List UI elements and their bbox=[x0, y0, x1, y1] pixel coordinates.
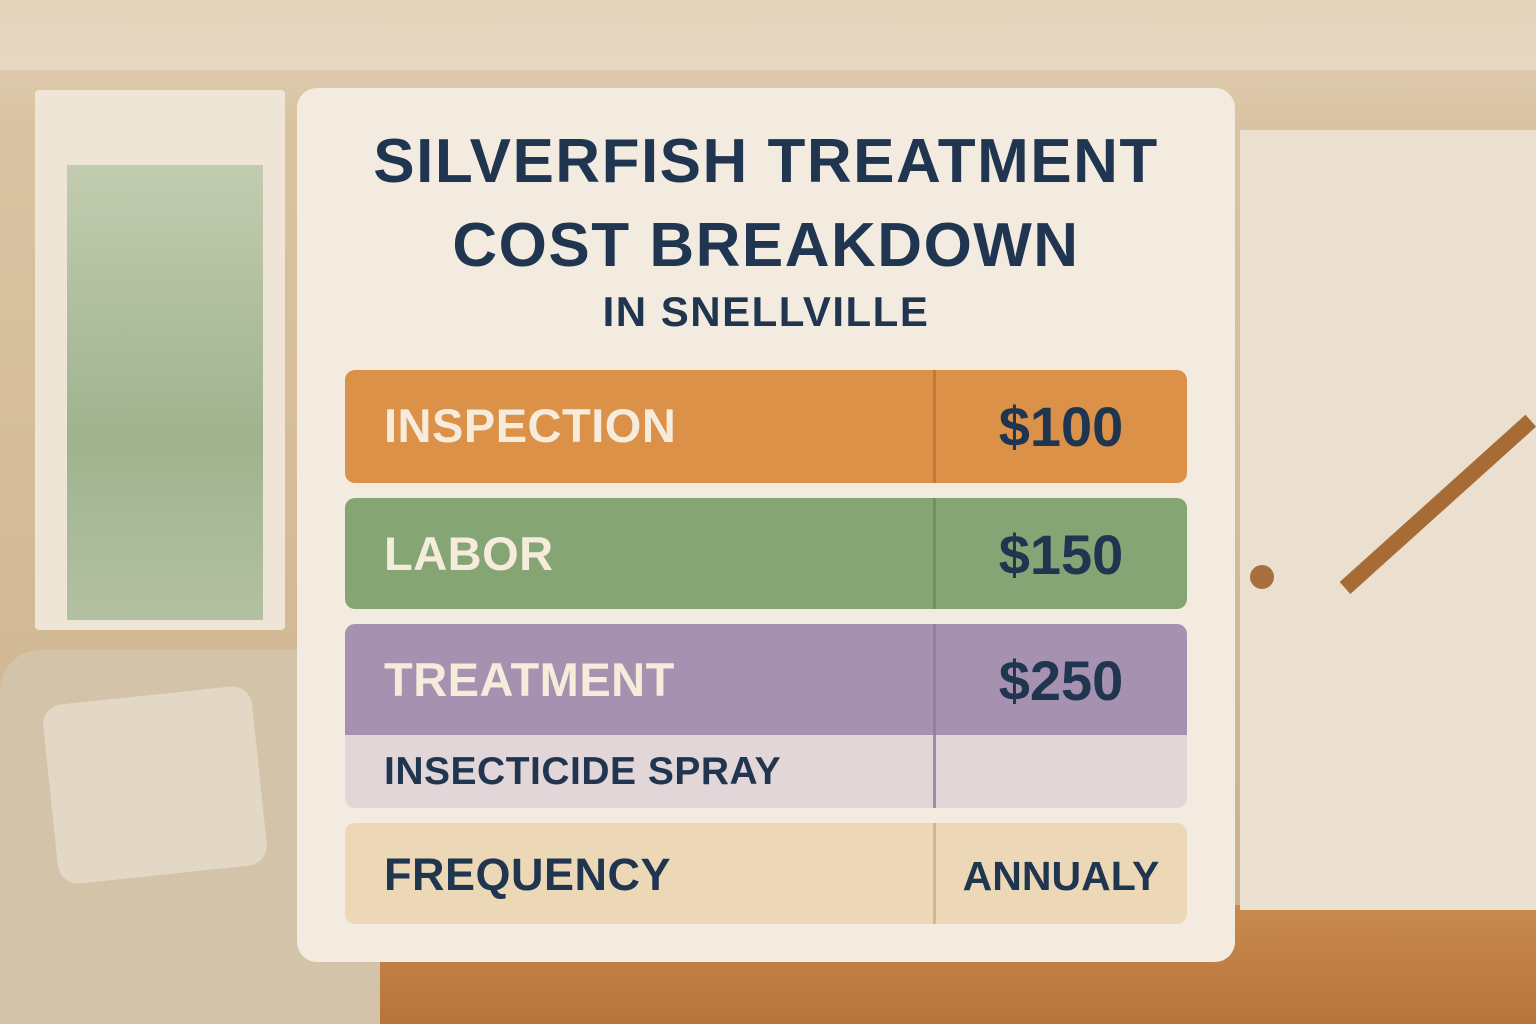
sofa bbox=[0, 650, 390, 1024]
row: frequency bbox=[345, 823, 1187, 924]
row: frequency: FREQUENCY bbox=[384, 849, 671, 900]
floor bbox=[380, 905, 1536, 1024]
row: inspection: $100 bbox=[999, 395, 1123, 458]
row: treatment bbox=[345, 624, 1187, 808]
row: labor: $150 bbox=[999, 523, 1123, 586]
ceiling bbox=[0, 0, 1536, 70]
row: labor: LABOR bbox=[384, 527, 554, 580]
row: treatment: INSECTICIDE SPRAY bbox=[384, 750, 781, 793]
row: labor bbox=[345, 498, 1187, 609]
row: treatment: $250 bbox=[999, 649, 1123, 712]
card bbox=[297, 88, 1235, 962]
row: inspection bbox=[345, 370, 1187, 483]
stair rail bbox=[1340, 415, 1536, 594]
title: SILVERFISH TREATMENT bbox=[373, 127, 1159, 196]
title bbox=[373, 127, 1159, 280]
subtitle: IN SNELLVILLE bbox=[603, 288, 929, 335]
title: COST BREAKDOWN bbox=[452, 211, 1080, 280]
row: inspection: INSPECTION bbox=[384, 399, 676, 452]
window bbox=[35, 90, 285, 630]
row: frequency: ANNUALY bbox=[963, 853, 1159, 899]
door bbox=[1240, 130, 1536, 910]
row: treatment: TREATMENT bbox=[384, 653, 675, 706]
